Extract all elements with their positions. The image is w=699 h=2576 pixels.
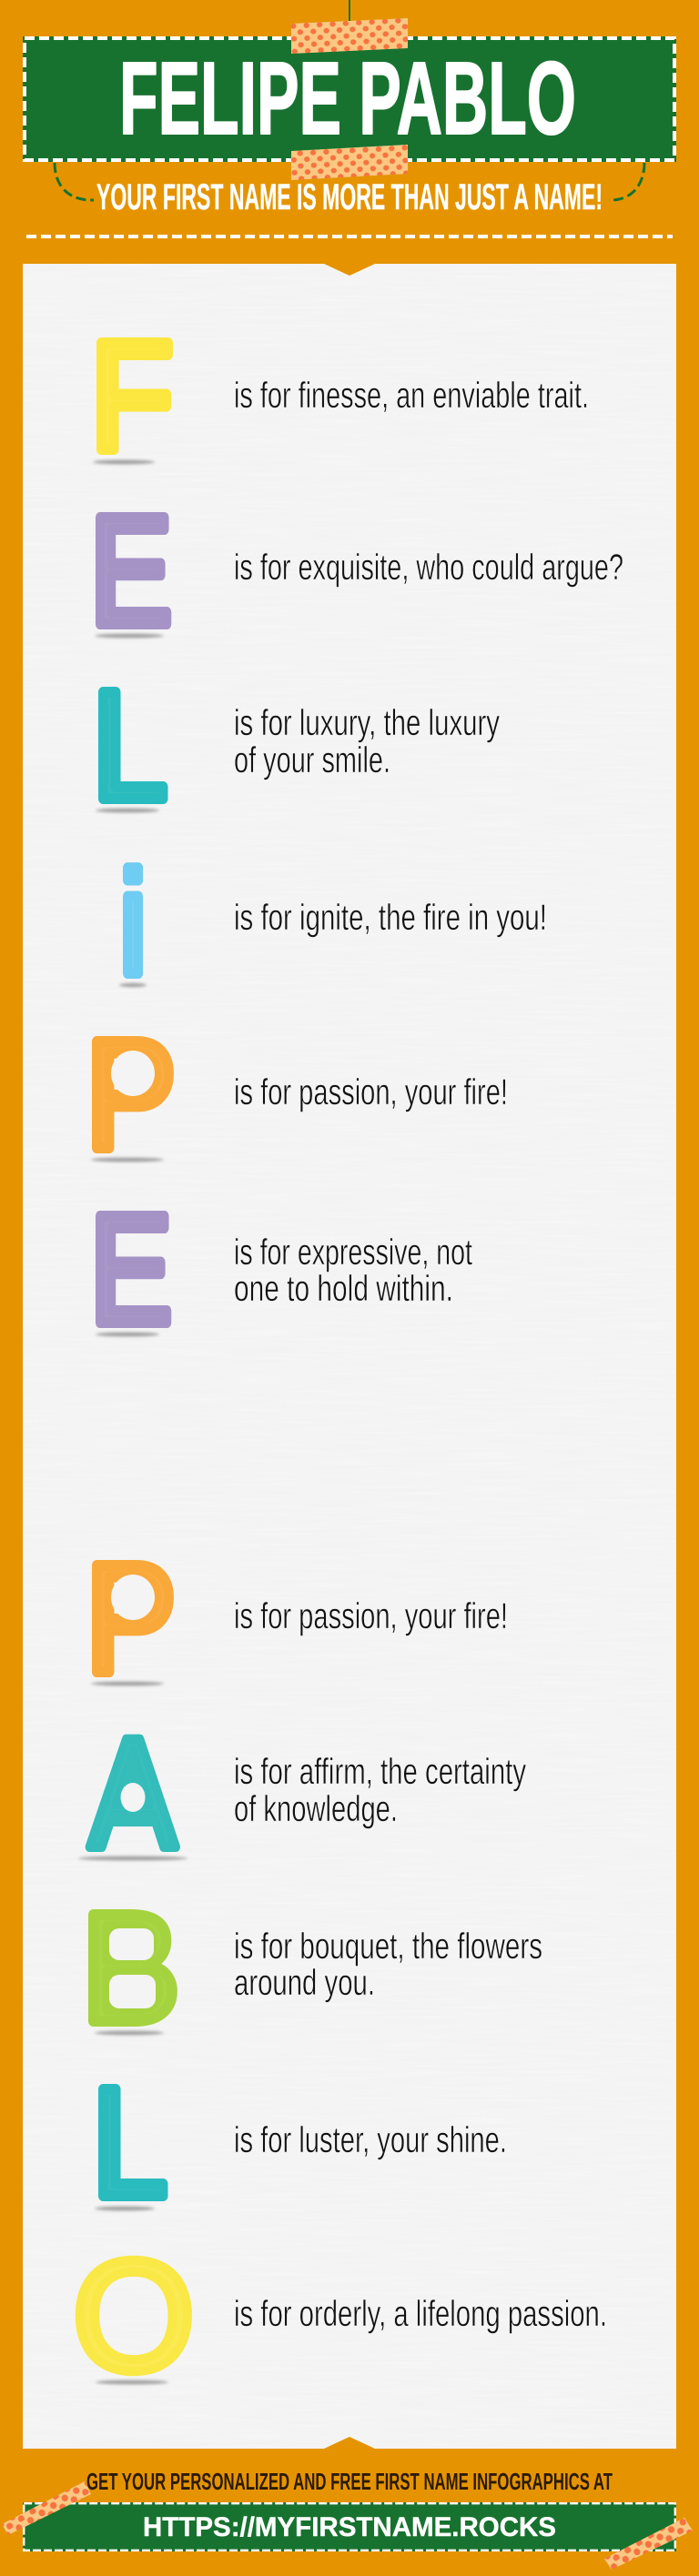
left bracket curve xyxy=(55,163,94,200)
description L: of your smile. xyxy=(234,740,390,780)
row: i xyxy=(119,843,547,1004)
row: L second xyxy=(92,2056,507,2229)
description L: is for luxury, the luxury xyxy=(234,703,500,743)
row: P xyxy=(86,1008,508,1181)
letter B: B xyxy=(81,1883,180,2055)
description A xyxy=(234,1752,526,1829)
description L second: is for luster, your shine. xyxy=(234,2120,507,2160)
tape: footer left xyxy=(2,2481,91,2535)
description P second: is for passion, your fire! xyxy=(234,1596,508,1636)
row: P second xyxy=(86,1532,508,1705)
right bracket curve xyxy=(609,163,644,200)
description B xyxy=(234,1927,542,2003)
letter i: i xyxy=(119,843,147,1004)
description E second: is for expressive, not xyxy=(234,1233,472,1273)
row: A xyxy=(78,1706,526,1880)
tape: footer right xyxy=(604,2518,693,2570)
dashed divider xyxy=(26,235,673,238)
hanging string xyxy=(349,0,350,22)
description A: is for affirm, the certainty xyxy=(234,1752,526,1792)
title banner xyxy=(23,36,676,162)
letter E: E xyxy=(90,485,172,657)
description B: around you. xyxy=(234,1963,375,2003)
letter O: O xyxy=(73,2227,195,2403)
description i: is for ignite, the fire in you! xyxy=(234,898,547,938)
letter L second: L xyxy=(92,2056,167,2229)
description L xyxy=(234,703,500,780)
row: F xyxy=(90,309,589,482)
URL: HTTPS://MYFIRSTNAME.ROCKS xyxy=(143,2512,556,2542)
row: E second xyxy=(90,1183,472,1355)
description P: is for passion, your fire! xyxy=(234,1072,508,1112)
tape: bottom of banner xyxy=(291,145,408,180)
description E second xyxy=(234,1233,472,1309)
letter A: A xyxy=(89,1706,177,1880)
panel: letters xyxy=(23,264,676,2449)
letter P: P xyxy=(86,1008,177,1181)
row: B xyxy=(81,1883,542,2055)
row: E xyxy=(90,485,623,657)
description A: of knowledge. xyxy=(234,1789,398,1829)
row: O xyxy=(73,2227,607,2403)
letter F: F xyxy=(90,309,174,482)
row: L xyxy=(92,659,500,831)
tape: top xyxy=(291,18,408,54)
letter P second: P xyxy=(86,1532,177,1705)
letter L: L xyxy=(92,659,167,831)
footer URL banner xyxy=(23,2502,676,2551)
description E second: one to hold within. xyxy=(234,1269,453,1309)
description B: is for bouquet, the flowers xyxy=(234,1927,542,1967)
letter E second: E xyxy=(90,1183,172,1355)
